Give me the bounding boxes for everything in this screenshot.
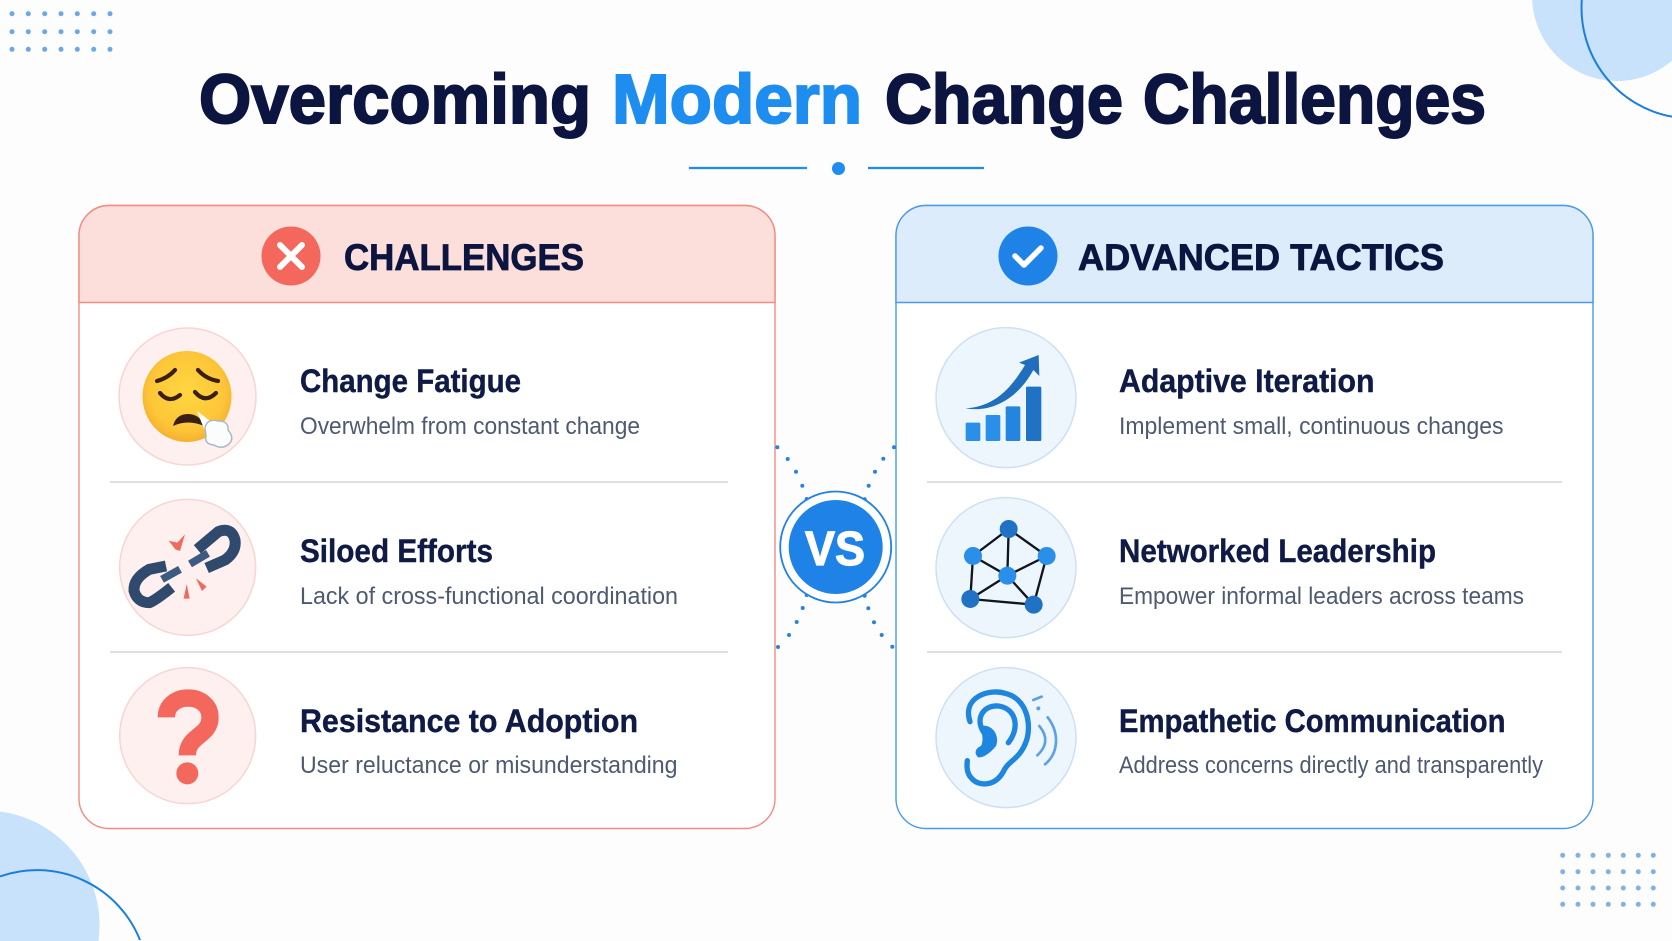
item: empathetic communication (936, 668, 1543, 808)
item description: User reluctance or misunderstanding (300, 752, 678, 779)
vs badge: VS (805, 523, 865, 576)
icon: broken chain (120, 499, 256, 635)
panel header: advanced tactics (896, 206, 1593, 302)
icon: tired face (119, 328, 256, 465)
title: Modern (612, 60, 862, 138)
decoration: top-right circle and arc (1532, 0, 1672, 117)
item title: Change Fatigue (300, 363, 521, 399)
icon: red cross (262, 226, 320, 286)
panel header: challenges (79, 206, 775, 302)
item description: Overwhelm from constant change (300, 413, 640, 440)
decoration: bottom-right dot grid (1560, 853, 1656, 907)
heading: challenges: CHALLENGES (344, 237, 584, 278)
icon: growth chart (936, 328, 1076, 468)
icon: blue check (998, 226, 1058, 286)
title (199, 60, 1486, 138)
title: Change (885, 60, 1123, 138)
item description: Empower informal leaders across teams (1119, 583, 1524, 610)
title divider (689, 162, 984, 175)
item title: Adaptive Iteration (1119, 363, 1374, 399)
icon: question mark (120, 668, 256, 804)
vs badge (780, 492, 891, 602)
item: networked leadership (936, 498, 1524, 638)
icon: network (936, 498, 1076, 638)
item: siloed efforts (120, 499, 678, 635)
decoration: bottom-left circle and arc (0, 812, 140, 941)
item description: Implement small, continuous changes (1119, 413, 1504, 440)
heading: advanced tactics: ADVANCED TACTICS (1078, 237, 1444, 278)
panel: advanced tactics (896, 206, 1593, 828)
item: change fatigue (119, 328, 640, 465)
icon: ear (936, 668, 1076, 808)
title: Overcoming (199, 60, 591, 138)
title: Challenges (1143, 60, 1486, 138)
item description: Address concerns directly and transparently (1119, 752, 1543, 779)
item: adaptive iteration (936, 328, 1504, 468)
vs connector dots (775, 445, 896, 649)
decoration: top-left dot grid (10, 11, 112, 52)
item title: Resistance to Adoption (300, 703, 638, 739)
item: resistance to adoption (120, 668, 677, 804)
item title: Networked Leadership (1119, 533, 1436, 569)
item description: Lack of cross-functional coordination (300, 583, 678, 610)
item title: Empathetic Communication (1119, 703, 1506, 739)
panel: challenges (79, 206, 775, 828)
item title: Siloed Efforts (300, 533, 493, 569)
